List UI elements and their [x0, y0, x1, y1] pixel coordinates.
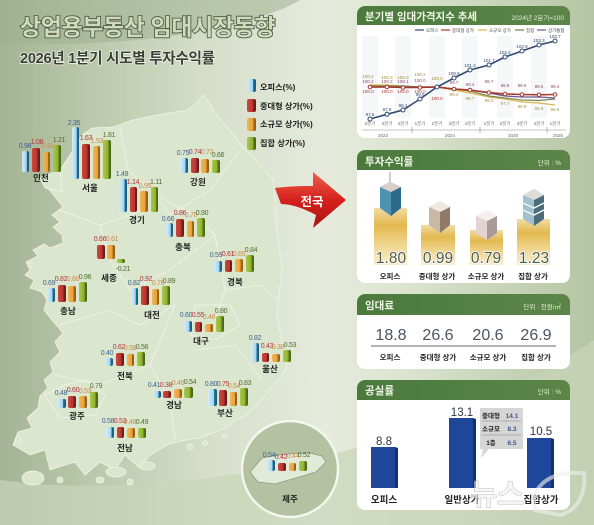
bar: office: 1.80 [376, 250, 406, 267]
region: 인천: 인천 [33, 173, 49, 183]
region: 부산: 0.80 [205, 381, 218, 388]
region: 대구: 0.80 [215, 308, 228, 315]
inset: 제주: 0.52 [298, 452, 311, 459]
panel header [357, 380, 570, 400]
callout: retail breakdown: 중대형 [482, 411, 500, 420]
bar: office: 오피스 [380, 272, 400, 281]
inset: 제주: 제주 [282, 494, 298, 504]
region: 대전: 0.82 [128, 280, 141, 287]
line chart: 2025 [508, 133, 519, 138]
region: 서울: 1.81 [103, 132, 116, 139]
bar: aggregate vacancy: 집합상가 [524, 494, 559, 506]
region: 서울: 2.35 [68, 120, 81, 127]
line chart: 4분기 [534, 120, 544, 127]
region: 경남: 0.54 [184, 379, 197, 386]
bar: small: 소규모 상가 [468, 271, 504, 281]
bar: small: 0.79 [471, 250, 501, 267]
bar: aggregate vacancy: 10.5 [530, 426, 552, 438]
region: 경기: 1.14 [127, 179, 140, 186]
panel: rent price index trend [357, 6, 570, 138]
panel: rent [357, 294, 570, 369]
bar: retail vacancy: 13.1 [451, 407, 473, 419]
line chart legend [415, 27, 565, 34]
line chart: 103.3 [533, 38, 545, 43]
line chart: 100.3 [397, 75, 409, 80]
region: 충남: 0.82 [55, 276, 68, 283]
rent values [375, 327, 552, 344]
panel header: 투자수익률 [365, 156, 414, 168]
line chart: 99.0 [416, 92, 425, 97]
line chart: 100.0 [431, 96, 443, 101]
region: 울산 [249, 335, 297, 374]
region: 강원: 0.72 [201, 149, 214, 156]
region: 충북 [162, 210, 209, 252]
region: 울산: 0.43 [261, 343, 274, 350]
region: 경기: 1.11 [150, 179, 162, 186]
region: 경남: 0.41 [148, 382, 161, 389]
bar: office vacancy [371, 436, 398, 506]
region: 전남: 0.49 [136, 419, 149, 426]
line chart: 98.6 [518, 83, 527, 88]
region: 경기 [116, 171, 162, 225]
line chart: 4분기 [398, 120, 408, 127]
region: 경북: 0.61 [222, 251, 235, 258]
rent labels: 집합 상가 [521, 352, 551, 362]
region: 광주: 0.79 [90, 383, 103, 390]
line chart legend: 중대형 상가 [452, 27, 474, 34]
region: 충남: 0.96 [79, 274, 92, 281]
legend: small: 소규모 상가(%) [260, 119, 313, 129]
region: 강원: 강원 [190, 177, 206, 187]
region: 대전: 0.76 [152, 280, 165, 287]
bar: aggregate: 1.23 [519, 250, 549, 267]
region: 충북: 충북 [175, 242, 191, 252]
line chart: 3분기 [449, 120, 459, 127]
region: 전북: 0.56 [136, 344, 149, 351]
panel header: 단위 : % [538, 158, 561, 167]
region: 충남: 0.69 [43, 280, 56, 287]
region: 세종: -0.21 [116, 266, 131, 273]
panel header: 2024년 2분기=100 [512, 13, 564, 22]
inset: 제주: 0.54 [263, 452, 276, 459]
region: 경남 [148, 379, 197, 410]
line chart: 98.2 [485, 98, 494, 103]
region: 전북: 0.58 [124, 345, 137, 352]
line chart: 97.8 [383, 107, 392, 112]
region: 경남: 0.38 [160, 382, 173, 389]
line chart: 100.4 [362, 74, 374, 79]
callout: retail breakdown: 1층 [486, 438, 496, 447]
line chart: 4분기 [465, 120, 475, 127]
region borders [45, 128, 277, 440]
watermark [470, 473, 584, 515]
line chart: 99.4 [450, 92, 459, 97]
line chart: 96.8 [535, 106, 544, 111]
line chart: 97.5 [366, 112, 375, 117]
legend [247, 79, 313, 150]
line chart: 100.2 [362, 79, 374, 84]
region: 울산: 0.38 [272, 344, 285, 351]
bar: small [468, 210, 504, 281]
region: 광주 [55, 383, 103, 421]
line chart: 100.2 [414, 72, 426, 77]
panel header: 분기별 임대가격지수 추세 [365, 10, 477, 23]
line chart: 100.0 [431, 76, 443, 81]
legend: aggregate: 집합 상가(%) [260, 138, 305, 148]
region: 인천: 1.21 [53, 137, 66, 144]
region: 서울: 1.63 [80, 135, 93, 142]
rent values: 18.8 [375, 327, 407, 344]
line chart: 98.7 [485, 79, 494, 84]
bar: mid-size [419, 201, 455, 281]
region: 경남: 경남 [166, 400, 182, 410]
line chart: 102.4 [499, 50, 511, 55]
region: 충북: 0.86 [174, 210, 187, 217]
region: 충북: 0.78 [185, 212, 198, 219]
region: 충남: 0.80 [67, 276, 80, 283]
region: 세종 [94, 236, 131, 283]
line chart: 2분기 [500, 120, 510, 127]
region: 강원: 0.75 [177, 150, 190, 157]
callout: retail breakdown: 14.1 [506, 413, 519, 420]
region: 경북: 0.84 [245, 247, 258, 254]
region: 대전 [128, 276, 176, 320]
line chart: 2023 [378, 133, 389, 138]
region: 경기: 경기 [129, 215, 145, 225]
region: 광주: 광주 [69, 411, 85, 421]
bar: mid-size: 중대형 상가 [419, 271, 455, 281]
region: 대전: 대전 [144, 310, 160, 320]
line chart: 98.7 [466, 96, 475, 101]
callout: retail breakdown: 6.5 [507, 440, 517, 447]
bar: office vacancy: 8.8 [376, 436, 392, 448]
rent labels [380, 352, 551, 362]
region: 강원: 0.66 [212, 152, 225, 159]
region: 강원 [177, 149, 225, 187]
region: 전북: 0.40 [101, 350, 114, 357]
region: 부산: 부산 [217, 408, 233, 418]
line chart: 99.4 [466, 82, 475, 87]
legend: mid-size: 중대형 상가(%) [260, 101, 313, 111]
region: 울산: 0.53 [284, 342, 297, 349]
map of South Korea [13, 95, 287, 485]
icon: small building [476, 210, 497, 240]
line chart: 100.3 [381, 75, 393, 80]
bar: aggregate vacancy [524, 426, 559, 506]
line chart legend: 오피스 [426, 27, 438, 34]
title: 상업용부동산 임대시장동향 [20, 14, 275, 40]
region: 대구: 0.60 [180, 312, 193, 319]
line chart: 3분기 [382, 120, 392, 127]
region: 전남: 0.58 [102, 418, 115, 425]
arrow: 전국 [275, 172, 346, 228]
region: 세종: 0.61 [106, 236, 119, 243]
rent values: 26.9 [520, 327, 552, 344]
region: 대구: 0.55 [192, 312, 205, 319]
line chart: 1분기 [484, 120, 494, 127]
panel header: 단위 : 천원/㎡ [523, 302, 561, 311]
callout: retail breakdown: 8.3 [507, 426, 517, 433]
panel: investment return [357, 150, 570, 283]
region: 부산 [205, 380, 252, 418]
panel: vacancy [357, 380, 570, 510]
region: 인천: 1.08 [31, 139, 44, 146]
line chart: 2분기 [432, 120, 442, 127]
bar: retail vacancy [445, 407, 480, 506]
callout: retail breakdown [480, 408, 523, 458]
region: 대전: 0.89 [163, 278, 176, 285]
line chart legend: 소규모 상가 [489, 27, 511, 34]
region: 전북 [101, 344, 149, 381]
region: 서울 [68, 120, 116, 193]
region: 전남 [102, 418, 149, 453]
line chart: 98.8 [501, 83, 510, 88]
region: 강원: 0.74 [189, 149, 202, 156]
region: 울산: 0.82 [249, 335, 262, 342]
region: 전남: 0.48 [124, 419, 137, 426]
region: 충북: 0.66 [162, 216, 175, 223]
region: 부산: 0.75 [217, 381, 230, 388]
line chart: 98.1 [399, 103, 408, 108]
subtitle: 2026년 1분기 시도별 투자수익률 [20, 50, 215, 67]
rent labels: 중대형 상가 [420, 352, 456, 362]
line chart: 97.7 [501, 101, 510, 106]
arrow: 전국: 전국 [300, 195, 324, 209]
region: 전북: 전북 [117, 371, 133, 381]
region: 경북 [210, 247, 258, 287]
line chart: 100.0 [397, 89, 409, 94]
rent values: 26.6 [422, 327, 454, 344]
rent values: 20.6 [472, 327, 504, 344]
line chart: 2024 [445, 133, 456, 138]
line chart: 2분기 [365, 120, 375, 127]
line chart: 100.0 [362, 89, 374, 94]
icon: mid-size building [429, 201, 450, 233]
panel header: 단위 : % [538, 387, 561, 396]
bar: aggregate [517, 189, 550, 281]
icon: aggregate building [523, 189, 544, 226]
bar: office vacancy: 오피스 [371, 495, 397, 506]
line chart: 98.5 [535, 84, 544, 89]
line chart: 1분기 [415, 120, 425, 127]
region: 부산: 0.54 [228, 383, 241, 390]
region: 광주: 0.60 [67, 387, 80, 394]
line chart: 99.7 [450, 80, 459, 85]
region: 대구: 대구 [193, 336, 209, 346]
bar: office [374, 172, 407, 281]
region: 광주: 0.53 [79, 388, 92, 395]
callout: retail breakdown: 소규모 [482, 425, 500, 433]
region: 인천: 0.91 [42, 143, 55, 150]
line chart: 102.9 [516, 44, 528, 49]
line chart legend: 상가통합 [548, 27, 565, 34]
line chart: 100.5 [448, 71, 460, 76]
region: 세종: 0.66 [94, 236, 107, 243]
line chart: 100.1 [397, 79, 409, 84]
region: 충남: 충남 [60, 306, 76, 316]
line chart: 100.0 [381, 89, 393, 94]
inset: 제주: 0.42 [275, 454, 288, 461]
line chart legend: 집합 [526, 27, 534, 33]
line chart: 103.7 [549, 34, 561, 39]
region: 충북: 0.90 [196, 210, 209, 217]
region: 경북: 0.65 [233, 251, 246, 258]
rent labels: 소규모 상가 [470, 352, 506, 362]
region: 인천: 0.98 [19, 143, 32, 150]
legend: office: 오피스(%) [260, 83, 296, 92]
line chart [362, 34, 566, 138]
line chart: 100.0 [414, 89, 426, 94]
region: 충남 [43, 274, 92, 316]
rent labels: 오피스 [380, 353, 400, 362]
line chart: 101.7 [483, 58, 495, 63]
region: 서울: 1.53 [91, 138, 104, 145]
panel header [357, 6, 570, 25]
region: 경북: 0.59 [210, 252, 223, 259]
line chart: 100.2 [381, 79, 393, 84]
line chart: 1분기 [550, 120, 560, 127]
panel header: 임대료 [365, 299, 394, 312]
region: 세종: 세종 [101, 273, 117, 283]
region: 경북: 경북 [227, 277, 243, 287]
region: 경기: 0.95 [139, 183, 152, 190]
line chart: 96.9 [518, 104, 527, 109]
line chart: 101.3 [464, 63, 476, 68]
line chart: 98.4 [551, 84, 560, 89]
region: 경기: 1.49 [116, 171, 129, 178]
watermark: 뉴스 [470, 479, 524, 512]
line chart: 2026 [553, 133, 564, 138]
panel header [357, 150, 570, 170]
region: 인천 [19, 137, 66, 183]
region: 전남: 0.53 [114, 418, 127, 425]
region: 대구 [180, 308, 228, 346]
region: 울산: 울산 [262, 364, 278, 374]
region: 전남: 전남 [117, 443, 133, 453]
bar: retail vacancy: 일반상가 [445, 494, 480, 506]
region: 대구: 0.46 [203, 314, 216, 321]
region: 부산: 0.83 [239, 380, 252, 387]
region: 광주: 0.48 [55, 390, 68, 397]
inset: 제주: 0.44 [287, 453, 300, 460]
bar: aggregate: 집합 상가 [518, 271, 548, 281]
line chart: 3분기 [517, 120, 527, 127]
bar: mid-size: 0.99 [423, 250, 453, 267]
line chart: 100.0 [414, 78, 426, 83]
panel header [357, 294, 570, 315]
region: 서울: 서울 [82, 183, 98, 193]
region: 경남: 0.46 [172, 380, 185, 387]
region: 대전: 0.92 [140, 276, 153, 283]
icon: office tower [380, 172, 401, 216]
line chart: 96.5 [551, 107, 560, 112]
inset: 제주 [242, 421, 338, 517]
panel header: 공실률 [365, 384, 394, 397]
region: 전북: 0.62 [113, 344, 126, 351]
